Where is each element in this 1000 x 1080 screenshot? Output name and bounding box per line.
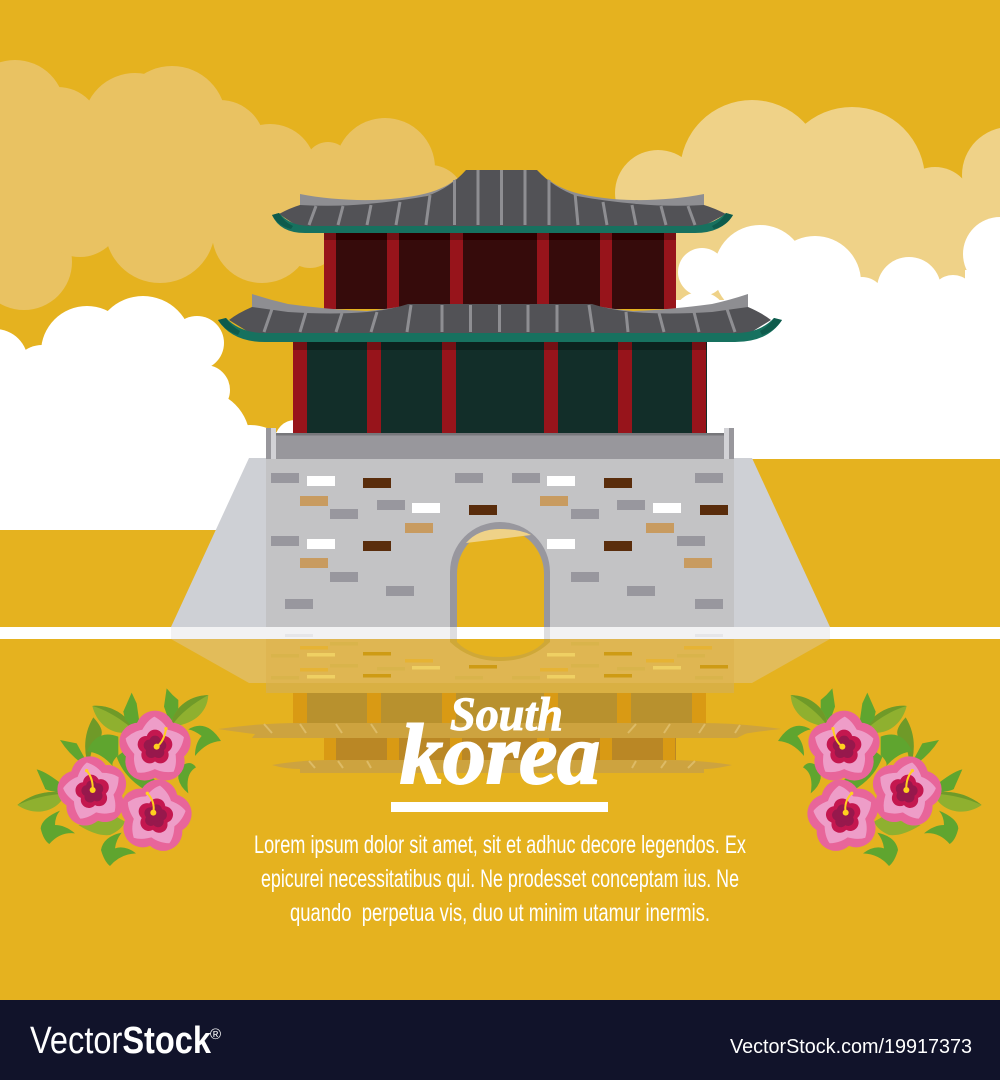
white water line [0, 627, 1000, 639]
title: South Korea: korea [400, 706, 600, 802]
wall face [266, 458, 734, 628]
lower roof [218, 294, 782, 342]
reflected wall [171, 639, 830, 683]
footer image id: VectorStock.com/19917373 [730, 1036, 972, 1058]
cloud: front right white [672, 217, 1000, 459]
footer bar [0, 1000, 1000, 1080]
reflected gate [450, 639, 550, 661]
body text: quando perpetua vis, duo ut minim utamur inermis. [290, 899, 710, 927]
title underline [391, 802, 608, 812]
reflected upper roof [272, 760, 732, 773]
fortress wall with gate [171, 458, 830, 628]
palace [218, 170, 782, 459]
reflected ledge [266, 683, 734, 693]
stone ledge [266, 428, 734, 459]
wall slopes [171, 458, 830, 627]
reflected upper floor [324, 738, 676, 760]
upper roof [272, 170, 733, 233]
reflected bricks [271, 642, 728, 680]
cloud: back right [615, 100, 1000, 300]
reflected lower roof [218, 723, 781, 738]
cloud: back left [0, 60, 465, 310]
lower floor [293, 342, 707, 433]
title: South Korea: South [450, 688, 563, 741]
footer logo: VectorStock [30, 1020, 212, 1062]
upper floor [324, 233, 676, 309]
flowers: right cluster [778, 688, 982, 866]
flowers: left cluster [17, 688, 221, 866]
body text: Lorem ipsum dolor sit amet, sit et adhuc decore legendos. Ex [254, 831, 746, 859]
footer registered mark: ® [210, 1026, 221, 1043]
body text: epicurei necessitatibus qui. Ne prodesset conceptam ius. Ne [261, 865, 739, 893]
reflection of the palace in the water [171, 639, 830, 773]
wall bricks [271, 473, 728, 609]
reflected lower floor [293, 693, 706, 724]
cloud: front left white [0, 296, 315, 530]
body text [254, 831, 746, 927]
gate arch [450, 522, 550, 628]
